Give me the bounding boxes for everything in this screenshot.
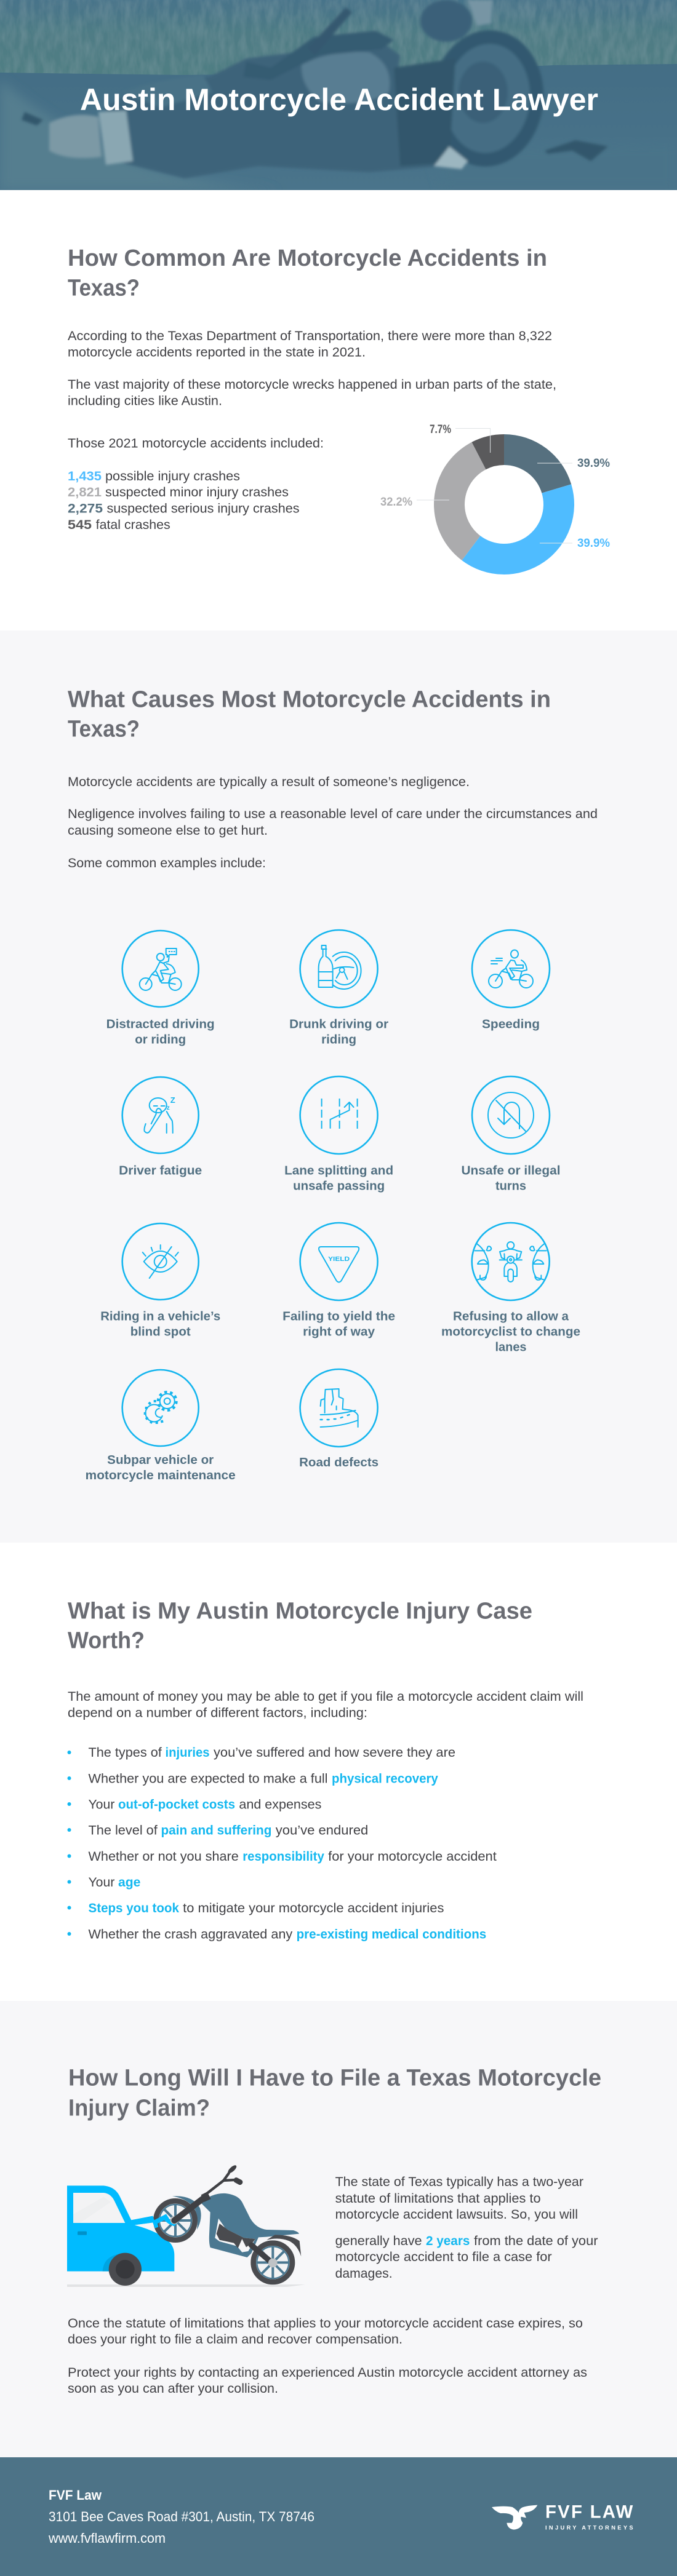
statute text <box>335 2175 598 2281</box>
factor list: for your motorcycle accident <box>328 1850 497 1864</box>
cause: unsafe or illegal turns <box>462 1076 560 1193</box>
icon: speeding rider <box>489 950 533 988</box>
factor list <box>68 1746 497 1941</box>
label <box>100 1309 220 1338</box>
factor list: you’ve suffered and how severe they are <box>214 1746 455 1760</box>
label <box>441 1309 580 1354</box>
heading <box>68 2065 601 2121</box>
intro text: including cities like Austin. <box>68 394 222 408</box>
label: riding <box>321 1033 356 1047</box>
factor list: Your <box>89 1797 114 1812</box>
statute text: statute of limitations that applies to <box>335 2192 541 2206</box>
label: Road defects <box>299 1455 379 1469</box>
donut chart: 39.9% <box>577 457 610 470</box>
factor list: to mitigate your motorcycle accident injuries <box>183 1901 444 1915</box>
section: what causes most motorcycle accidents <box>68 690 597 1482</box>
label <box>462 1163 560 1193</box>
statute text: The state of Texas typically has a two-year <box>335 2175 583 2189</box>
statute text: motorcycle accident to file a case for <box>335 2250 552 2264</box>
factor list: injuries <box>165 1746 209 1760</box>
contact details: FVF Law <box>49 2487 102 2503</box>
label: motorcycle maintenance <box>86 1468 236 1482</box>
donut chart <box>380 423 610 574</box>
crash type list: suspected serious injury crashes <box>107 502 299 515</box>
label: right of way <box>303 1325 375 1338</box>
crash type list: Those 2021 motorcycle accidents included: <box>68 437 324 450</box>
negligence text: Motorcycle accidents are typically a result of someone’s negligence. <box>68 775 470 789</box>
heading <box>68 1598 532 1654</box>
section: how common are motorcycle accidents <box>0 190 677 630</box>
statute text: generally have <box>335 2234 422 2248</box>
crash type list: 545 <box>68 518 92 532</box>
factor list: out-of-pocket costs <box>118 1797 235 1812</box>
closing text <box>68 2316 587 2396</box>
cause: speeding <box>472 930 550 1032</box>
label: Driver fatigue <box>119 1163 202 1177</box>
intro text <box>68 1690 583 1720</box>
negligence text <box>68 775 598 870</box>
icon: motorcyclist between two cars <box>472 1242 550 1282</box>
crash type list: suspected minor injury crashes <box>105 485 289 499</box>
title: Austin Motorcycle Accident Lawyer <box>80 82 598 117</box>
section: how long to file <box>0 2001 677 2457</box>
icon: lanes with arrow <box>322 1099 358 1132</box>
icon: yawning driver: Z <box>170 1095 175 1105</box>
intro text <box>68 329 556 408</box>
banner photo: crashed motorcycle on road <box>0 0 677 190</box>
logo: FVF Law Injury Attorneys: INJURY ATTORNEYS <box>545 2525 633 2531</box>
crash type list: 2,275 <box>68 502 103 515</box>
factor list: pre-existing medical conditions <box>297 1928 486 1941</box>
heading: Texas? <box>68 276 140 301</box>
header banner <box>0 0 677 190</box>
label: Subpar vehicle or <box>107 1453 214 1467</box>
negligence text: causing someone else to get hurt. <box>68 824 268 838</box>
crash type list: fatal crashes <box>96 518 170 532</box>
label <box>289 1017 388 1047</box>
label: lanes <box>495 1340 527 1354</box>
contact details: www.fvflawfirm.com <box>48 2530 166 2546</box>
crash type list: 2,821 <box>68 485 102 499</box>
negligence text: Negligence involves failing to use a reasonable level of care under the circumstances and <box>68 807 598 821</box>
statute text: 2 years <box>426 2234 470 2248</box>
cause: distracted driving <box>106 931 215 1047</box>
label <box>86 1453 236 1482</box>
factor list: Steps you took <box>89 1901 179 1915</box>
factor list: Whether you are expected to make a full <box>89 1771 327 1786</box>
label: Refusing to allow a <box>453 1309 569 1324</box>
label: Distracted driving <box>106 1017 215 1032</box>
intro text: The vast majority of these motorcycle wrecks happened in urban parts of the state, <box>68 378 556 392</box>
heading: Worth? <box>68 1628 145 1654</box>
label: Unsafe or illegal <box>462 1163 560 1177</box>
heading: Texas? <box>68 716 140 742</box>
heading: What is My Austin Motorcycle Injury Case <box>68 1598 532 1624</box>
crash type list: 1,435 <box>68 469 102 483</box>
heading: How Long Will I Have to File a Texas Motorcycle <box>68 2065 601 2091</box>
cause: blind spot <box>100 1223 220 1338</box>
donut chart: 32.2% <box>380 496 412 509</box>
closing text: does your right to file a claim and recover compensation. <box>68 2332 403 2347</box>
icon: bottle and steering wheel <box>319 945 361 989</box>
illustration: car colliding with motorcycle <box>67 2164 306 2287</box>
intro text: The amount of money you may be able to get if you file a motorcycle accident claim will <box>68 1690 583 1704</box>
section: case worth <box>0 1543 677 2001</box>
closing text: Once the statute of limitations that applies to your motorcycle accident case expires, so <box>68 2316 583 2331</box>
cause: drunk driving <box>289 930 388 1047</box>
label: Drunk driving or <box>289 1017 388 1032</box>
factor list: responsibility <box>242 1850 324 1864</box>
label: Failing to yield the <box>282 1309 395 1324</box>
factor list: Your <box>89 1875 114 1890</box>
icon: broken road at cliff <box>321 1389 358 1427</box>
icon: no u-turn sign <box>488 1092 534 1138</box>
heading: How Common Are Motorcycle Accidents in <box>68 245 547 271</box>
factor list: physical recovery <box>332 1771 438 1786</box>
factor list: age <box>118 1875 140 1890</box>
closing text: Protect your rights by contacting an experienced Austin motorcycle accident attorney as <box>68 2366 587 2380</box>
closing text: soon as you can after your collision. <box>68 2382 278 2396</box>
crash type list <box>68 437 324 532</box>
cause: refusing lane change <box>441 1223 580 1354</box>
factor list: you’ve endured <box>276 1823 368 1838</box>
cause: failing to yield <box>282 1223 395 1338</box>
label: blind spot <box>130 1325 191 1338</box>
logo: FVF Law Injury Attorneys <box>492 2502 633 2531</box>
negligence text: Some common examples include: <box>68 856 266 870</box>
intro text: depend on a number of different factors, including: <box>68 1706 367 1720</box>
heading <box>68 245 547 301</box>
donut chart: 39.9% <box>577 537 610 550</box>
icon: yield sign <box>319 1247 359 1282</box>
statute text: damages. <box>335 2267 393 2281</box>
cause: road defects <box>299 1369 379 1469</box>
heading <box>68 686 551 742</box>
label <box>282 1309 395 1338</box>
contact details <box>48 2487 314 2546</box>
cause: lane splitting <box>284 1076 393 1193</box>
statute text: from the date of your <box>474 2234 598 2248</box>
donut chart: 7.7% <box>430 423 451 436</box>
label: or riding <box>135 1033 186 1047</box>
factor list: and expenses <box>239 1797 321 1812</box>
heading: What Causes Most Motorcycle Accidents in <box>68 686 551 712</box>
intro text: According to the Texas Department of Transportation, there were more than 8,322 <box>68 329 552 343</box>
cause: driver fatigue <box>119 1077 202 1177</box>
icon: rider texting <box>140 948 182 990</box>
icon: crossed-out eye <box>143 1245 178 1278</box>
label: Riding in a vehicle’s <box>100 1309 220 1324</box>
label <box>106 1017 215 1047</box>
contact details: 3101 Bee Caves Road #301, Austin, TX 78746 <box>49 2509 314 2524</box>
icon: gears <box>144 1392 177 1424</box>
label: motorcyclist to change <box>441 1325 580 1338</box>
statute text: motorcycle accident lawsuits. So, you will <box>335 2208 578 2222</box>
logo: FVF Law Injury Attorneys: FVF LAW <box>545 2502 633 2522</box>
label: unsafe passing <box>293 1179 385 1193</box>
icon: yield sign: YIELD <box>328 1255 350 1263</box>
footer <box>0 2457 677 2576</box>
factor list: The types of <box>89 1746 162 1760</box>
label: Lane splitting and <box>284 1163 393 1177</box>
label <box>284 1163 393 1193</box>
intro text: motorcycle accidents reported in the state in 2021. <box>68 346 366 359</box>
factor list: Whether the crash aggravated any <box>89 1928 293 1941</box>
icon: yawning driver: z <box>167 1105 170 1111</box>
label: turns <box>495 1179 526 1193</box>
cause: subpar maintenance <box>86 1370 236 1482</box>
label: Speeding <box>482 1017 540 1032</box>
factor list: The level of <box>89 1823 158 1838</box>
crash type list: possible injury crashes <box>105 469 240 483</box>
heading: Injury Claim? <box>68 2095 210 2121</box>
icon: yawning driver <box>144 1095 175 1133</box>
factor list: Whether or not you share <box>89 1850 239 1864</box>
factor list: pain and suffering <box>161 1823 271 1838</box>
